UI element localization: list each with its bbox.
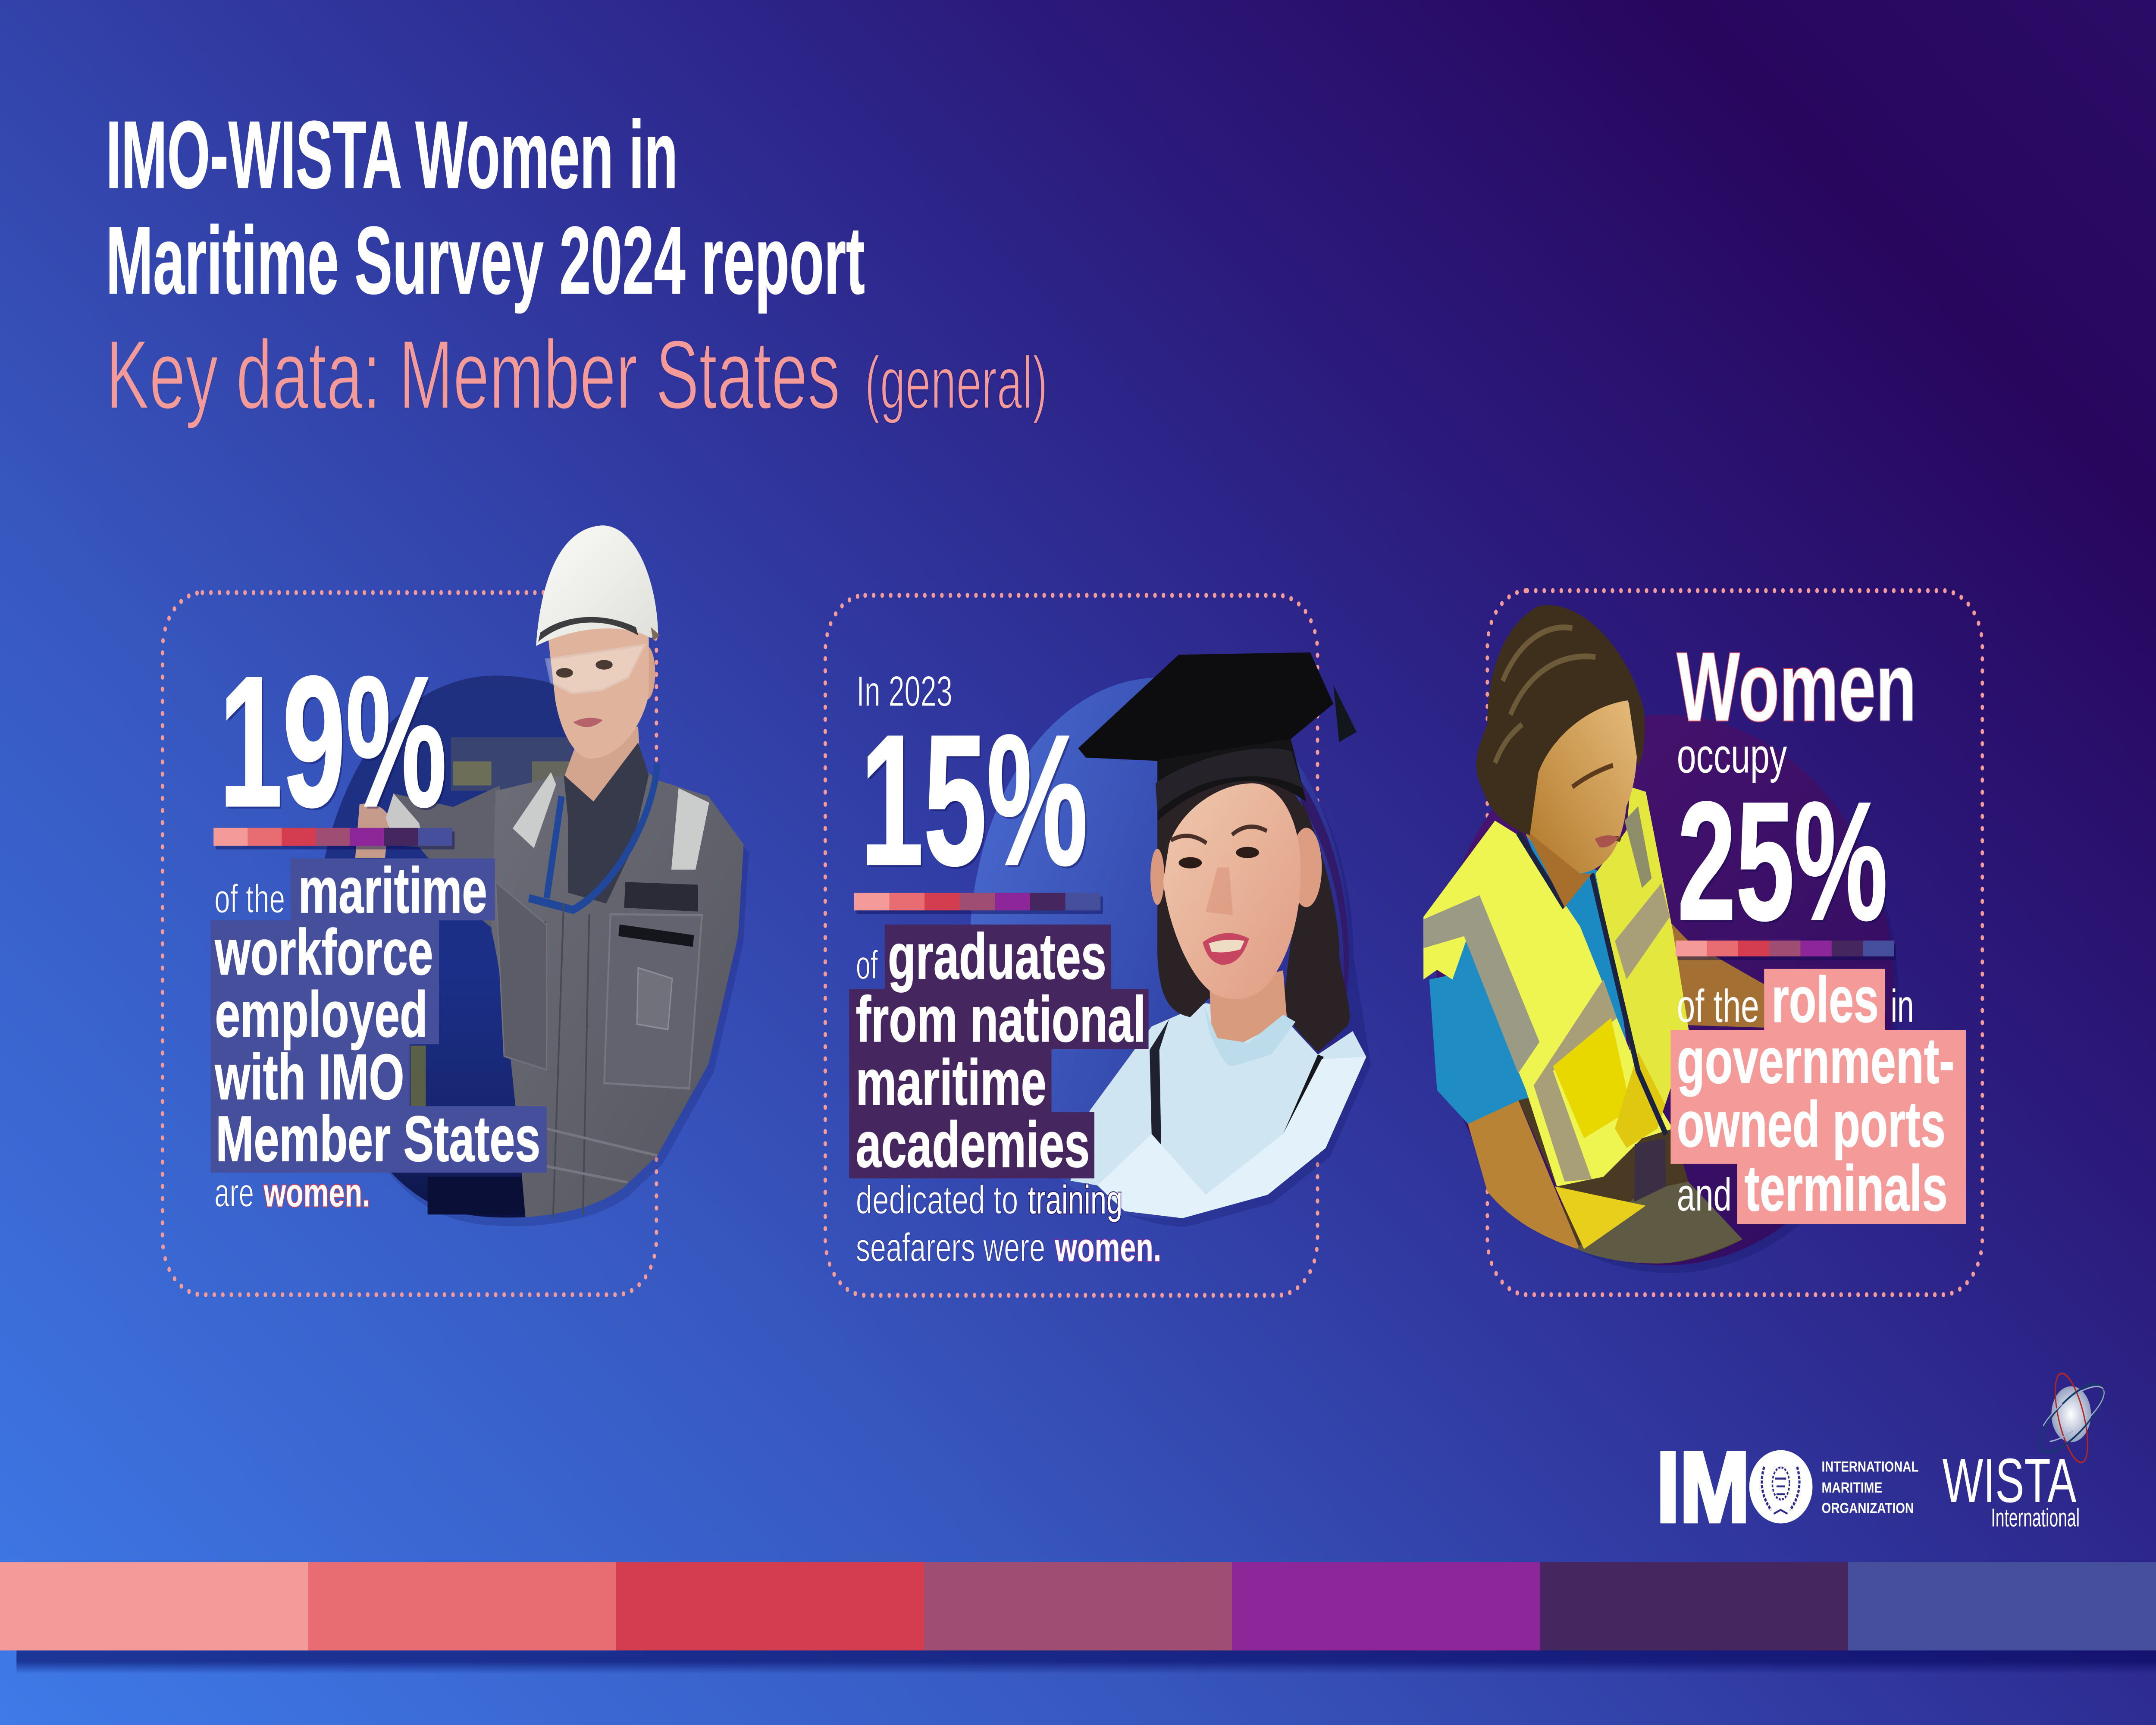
panel: 19% maritime workforce [163,525,749,1295]
description text: workforce [215,916,433,988]
description text: academies [856,1109,1090,1181]
description text: in [1891,981,1914,1032]
photo: graduate in cap and gown [970,652,1371,1226]
subtitle: (general) [865,341,1048,424]
subtitle: Key data: Member States [106,320,840,430]
icon: IMO emblem [1762,1467,1799,1514]
logo: IMO: INTERNATIONAL [1821,1459,1918,1475]
description text: of the [214,877,285,922]
panel: 25% roles in ports [1423,591,1982,1295]
photo: woman in hard hat and coverall [317,525,749,1226]
description text: with IMO [215,1041,404,1113]
text highlight blocks [849,925,1149,1178]
photo: woman in high-visibility vest [1423,605,1899,1273]
stat: 15%: 15% [860,696,1088,903]
description text [1677,964,1955,1224]
description text: of the [1677,981,1759,1032]
description text [856,921,1161,1270]
description text: maritime [856,1047,1047,1119]
title: IMO-WISTA Women in [106,101,678,208]
colour band shadow [16,1649,2156,1674]
text highlight blocks [1670,969,1966,1224]
label: occupy: occupy [1677,728,1787,783]
description text: of [856,943,878,988]
text highlight blocks [211,858,547,1173]
heading: Women: Women [1677,632,1917,741]
description text: terminals [1745,1153,1948,1224]
logo: WISTA International [1942,1368,2109,1532]
stat: 25%: 25% [1677,768,1888,955]
description text: from national [856,984,1146,1055]
title: Maritime Survey 2024 report [106,207,865,314]
dotted frame [825,595,1317,1295]
description text: government- [1677,1025,1955,1097]
description text: are [214,1170,254,1216]
label: In 2023: In 2023 [856,668,953,715]
logo: IMO: IM [1656,1432,1750,1543]
description text: roles [1771,964,1879,1036]
description text: graduates [888,921,1106,993]
stat: 25%: 25% [1680,770,1890,958]
panel: 15% graduates [825,595,1371,1295]
dotted frame [163,593,656,1295]
description text: training [1028,1178,1122,1223]
description text [214,855,540,1216]
stat: 19%: 19% [221,640,448,848]
stat: 15%: 15% [862,699,1090,906]
description text: and [1677,1169,1732,1220]
description text: women. [263,1170,370,1216]
logo: WISTA International: WISTA [1942,1445,2077,1515]
description text: dedicated to [856,1178,1018,1223]
description text: employed [215,979,428,1051]
description text: maritime [298,855,487,926]
description text: Member States [216,1103,540,1175]
colour swatch bar [854,893,1103,914]
logo: IMO: MARITIME [1821,1480,1882,1496]
colour swatch bar [1676,941,1896,960]
icon: globe with orbits [2033,1368,2109,1468]
colour swatch bar [213,828,454,850]
logo: WISTA International: International [1991,1503,2080,1532]
description text: women. [1055,1225,1161,1270]
dotted frame [1487,591,1982,1295]
description text: seafarers were [856,1225,1045,1270]
title [106,101,865,314]
logo: IMO: ORGANIZATION [1821,1500,1914,1516]
stat: 19%: 19% [219,638,447,845]
description text: owned ports [1677,1088,1946,1160]
logo: IMO [1656,1432,1918,1543]
colour band [0,1562,2156,1650]
